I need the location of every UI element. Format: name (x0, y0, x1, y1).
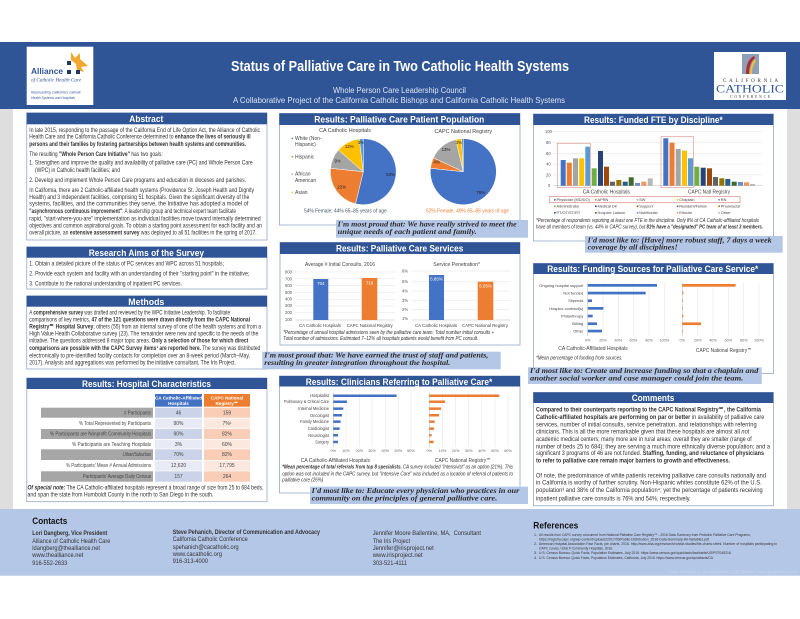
bar chart: service penetration: 5.85% (430, 276, 443, 282)
legend: ethnicity: American (295, 178, 316, 184)
logo: Alliance of Catholic Health Care: Representing California's Catholic (31, 90, 81, 94)
bar chart: funding CA Catholic: 60% (629, 339, 638, 343)
bar chart: FTE by discipline: 40 (546, 162, 551, 167)
title: Status of Palliative Care in Two Catholic Health Systems (231, 58, 569, 75)
bar chart: referrals CA Catholic: 0% (331, 449, 337, 453)
bar chart: referrals CA Catholic: Hospitalist (310, 393, 330, 398)
bar chart: referrals CAPC (427, 393, 512, 464)
bar chart: funding CAPC: 80% (740, 339, 748, 343)
text block: abstract body: "asynchronous continuous improvement": A leadership group and technical expert team facilitate (29, 209, 237, 215)
legend: disciplines: Nutritionist (639, 210, 658, 215)
bar chart: average initial consults: CAPC National Registry (347, 323, 393, 329)
text block: references list: https://registry.capc.org/wp-content/uploads/2017/09/Public-Distribution_2016-Data-Summary-All-Variables.pdf (539, 538, 710, 542)
bar chart: FTE by discipline (545, 129, 762, 215)
bar chart: referrals CA Catholic: Neurologist (308, 433, 330, 438)
text block: comments body: Compared to their counterparts reporting to the CAPC National Registry℠, the California (536, 406, 761, 413)
text block: abstract body: Health) and 3 independent facilities, comprising 51 hospitals. Given the significant diversity of the (29, 195, 250, 201)
text block: research aims list: 1. Obtain a detailed picture of the status of PC services and WPC across 51 hospitals; (29, 261, 224, 267)
bar chart: referrals CA Catholic: 30% (368, 449, 376, 453)
contact: Steve Pehanich: Steve Pehanich, Director of Communication and Advocacy (173, 529, 320, 536)
footnote: clinicians: palliative care (26%) (281, 477, 323, 483)
logo: California Catholic Conference (714, 52, 786, 100)
bar chart: referrals CA Catholic: Oncologist (310, 413, 330, 418)
bar chart: referrals CA Catholic: 40% (381, 449, 390, 453)
bar chart: service penetration: CA Catholic Hospitals (415, 323, 458, 329)
text block: comments body: population³ and 38% of the California population⁴; yet the percentage of patients receiving (536, 487, 763, 494)
contact: Lori Dangberg: www.thealliance.net (31, 552, 84, 559)
legend: ethnicity: Hispanic (295, 154, 315, 160)
table: hospital characteristics: 82% (222, 432, 233, 438)
callout: proud of earning trust (262, 352, 501, 369)
table: hospital characteristics: % Total Represented by Participants (79, 421, 151, 427)
bar chart: FTE by discipline: 80 (546, 140, 551, 145)
footnote: services: Total number of admissions. Estimated 7–12% all hospitals patients would benefit from PC consult. (283, 336, 478, 342)
text block: comments body: services, number of initial consults, service penetration, and relationships with referring (536, 421, 757, 428)
text block: comments body: academic medical centers; many more are in rural areas; overall they are smaller (range of (536, 436, 752, 443)
text block: special note (28, 485, 264, 498)
bar chart: service penetration: 4% (402, 288, 408, 294)
contact: Jennifer Ballentine (372, 530, 481, 567)
legend: disciplines: PT/OT/ST/RT (556, 210, 581, 215)
heading: funding sources: Results: Funding Sources for Palliative Care Service* (547, 264, 759, 275)
table: hospital characteristics: CAPC National (211, 396, 243, 400)
text block: comments body: clinicians. This is all the more remarkable given that these hospitals are almost all not (536, 429, 750, 436)
bar chart: average initial consults: 200 (285, 310, 293, 315)
legend: ethnicity: White (Non- (295, 136, 322, 142)
bar chart: average initial consults (285, 262, 395, 329)
text block: abstract body: objectives and common aspirational goals. To obtain a starting point assessment for each facility and an (29, 223, 262, 229)
bar chart: service penetration: 1% (402, 316, 408, 321)
footnote: services: *Percentage of annual hospital admissions seen by the palliative care team. Total number initial consults ÷ (283, 330, 494, 336)
bar chart: funding CA Catholic: Other (573, 328, 584, 334)
logo: Alliance of Catholic Health Care: Health Systems and Hospitals (31, 96, 75, 100)
table: hospital characteristics: 12,620 (171, 463, 186, 469)
bar chart: funding CA Catholic: Billing (572, 321, 583, 326)
text block: methods body: A comprehensive survey was drafted and reviewed by the WPC Initiative Leadership. To facilitate (29, 310, 231, 316)
bar chart: referrals CAPC: 30% (465, 449, 473, 453)
panel: methods (27, 296, 267, 369)
bar chart: average initial consults: 300 (285, 303, 293, 308)
panel: research aims (27, 247, 267, 289)
callout: proud of earning trust: I'm most proud that: We have earned the trust of staff and patients, (263, 352, 489, 359)
table: hospital characteristics: 159 (223, 410, 231, 416)
bar chart: referrals CA Catholic: Internal Medicine (298, 406, 330, 411)
text block: comments body: Of note, the predominance of white patients receiving palliative care consults nationally and (536, 473, 767, 480)
bar chart: average initial consults: 704 (317, 281, 325, 286)
text block: comments body: number of beds 25 to 684); they are serving a much more ethnically diverse population; and a (536, 443, 771, 450)
heading: research aims: Research Aims of the Survey (89, 248, 205, 259)
bar chart: funding CAPC: 0% (680, 339, 686, 343)
bar chart: funding CAPC: 60% (724, 339, 733, 343)
table: hospital characteristics: 17,795 (219, 463, 235, 469)
callout: educate every physician: I'd most like to: Educate every physician who practices in our (310, 488, 520, 495)
panel: hospital characteristics (27, 378, 267, 502)
bar chart: referrals CA Catholic: 50% (394, 449, 403, 453)
bar chart: service penetration: 5.05% (479, 284, 492, 288)
bar chart: average initial consults: 800 (285, 270, 293, 274)
table: hospital characteristics: 90% (173, 432, 184, 438)
bar chart: average initial consults: 500 (285, 290, 293, 295)
text block: references list: 3. (534, 551, 537, 555)
pie chart: CAPC national registry: 13% (442, 147, 450, 152)
text block: abstract body: rapid, "start-where-you-are" implementation as individual facilities move toward internally determined (29, 216, 261, 222)
header banner (0, 42, 800, 109)
legend: disciplines: Other (721, 210, 731, 215)
bar chart: funding CAPC: 100% (754, 339, 764, 343)
heading: hospital characteristics: Results: Hospital Characteristics (82, 379, 211, 390)
text block: abstract body: systems, facilities, and the communities they serve, the Initiative has adopted a model of (29, 202, 249, 208)
text block: references list (534, 533, 777, 560)
legend: disciplines: Chaplain (679, 197, 695, 202)
panel: funded FTE (533, 114, 774, 241)
panel: clinicians referring (279, 376, 520, 493)
pie chart: CAPC national registry: 52% Female; 49% 65–85 years of age (426, 209, 509, 215)
bar chart: average initial consults: 700 (285, 276, 293, 281)
table: hospital characteristics: % Participants are Teaching Hospitals (72, 442, 151, 448)
bar chart: funding CA Catholic: Not funded (563, 290, 583, 296)
table: hospital characteristics: Hospitals (168, 401, 189, 406)
legend: disciplines: Medical Dir (598, 204, 618, 209)
footnote: clinicians: option was not included in the CAPC survey, but "Intensive Care" was included as a location of referral of patients to (282, 471, 513, 477)
table: hospital characteristics: CA Catholic-Affiliated (155, 396, 202, 400)
bar chart: FTE by discipline: CA Catholic Hospitals (583, 190, 630, 196)
contact: Jennifer Ballentine: 303-521-4111 (373, 560, 407, 567)
contact: Steve Pehanich: spehanich@cacatholic.org (173, 544, 239, 551)
bar chart: average initial consults: Average # Initial Consults, 2016 (305, 262, 375, 268)
bar chart: service penetration: CAPC National Registry (462, 323, 509, 329)
text block: methods body: comparisons are possible with the CAPC Survey items¹ are reported here. The survey was distributed (29, 345, 260, 352)
heading: patient population: Results: Palliative Care Patient Population (314, 115, 484, 126)
bar chart: funding CA Catholic: Ongoing hospital support (539, 283, 584, 288)
bar chart: service penetration: 3% (402, 298, 408, 303)
contact: Jennifer Ballentine: www.irisproject.net (372, 552, 423, 559)
legend: disciplines: SW (639, 197, 646, 202)
bar chart: referrals CA Catholic: Family Medicine (300, 419, 330, 424)
bar chart: referrals CA Catholic: 10% (342, 449, 350, 453)
bar chart: funding CA Catholic: 100% (659, 339, 670, 343)
callout: create funding (528, 367, 762, 384)
callout: proud of meeting unique needs: unique needs of each patient and family. (338, 229, 477, 236)
text block: abstract body: The resulting "Whole Person Care Initiative" has two goals: (29, 152, 163, 158)
callout: proud of meeting unique needs (336, 220, 528, 238)
panel: abstract (27, 113, 267, 240)
pie chart: CA Catholic hospitals (292, 128, 396, 215)
bar chart: average initial consults: CA Catholic Hospitals (299, 323, 342, 329)
heading: funded FTE: Results: Funded FTE by Discipline* (584, 115, 723, 126)
text block: methods body: initiative. The questions addressed 8 major topic areas. Only a selection of those for which direct (29, 339, 248, 345)
table: hospital characteristics: 60% (222, 442, 233, 448)
bar chart: service penetration: 2% (402, 307, 408, 312)
pie chart: CAPC national registry: 3% (456, 140, 462, 145)
legend: ethnicity (292, 136, 322, 196)
bar chart: referrals CAPC: 50% (491, 449, 499, 453)
bar chart: referrals CA Catholic: Cardiologist (308, 426, 330, 431)
legend: ethnicity: Asian (295, 190, 308, 196)
contact: Lori Dangberg: ldangberg@thealliance.net (32, 545, 100, 552)
bar chart: funding CA Catholic: CA Catholic-Affiliated Hospitals (558, 346, 628, 352)
logo: Alliance of Catholic Health Care (27, 47, 93, 105)
text block: comments body: inpatient palliative care consults is 76% and 54%, respectively. (536, 495, 691, 502)
callout: educate every physician (310, 487, 528, 504)
callout: more robust staff: I'd most like to: [Have] more robust staff, 7 days a week (587, 237, 772, 244)
bar chart: referrals CA Catholic: Surgery (315, 440, 330, 444)
text block: abstract body: overall picture, an extensive assessment survey was deployed to all 51 facilities in the spring of 2017. (29, 230, 257, 236)
subtitle: A Collaborative Project of the California Catholic Bishops and California Catholic Health Systems (233, 96, 565, 105)
text block: methods body: Registry℠ Hospital Survey; others (55) from an internal survey of one of the health systems and from a (29, 323, 262, 330)
legend: ethnicity: African (295, 172, 311, 178)
table: hospital characteristics: 157 (174, 474, 183, 480)
logo: Alliance of Catholic Health Care: Alliance (31, 67, 64, 76)
table: hospital characteristics: Registry℠ (215, 401, 239, 406)
bar chart: funding CA Catholic: 0% (585, 339, 591, 343)
legend: disciplines: Hospice Liaison (598, 210, 625, 215)
pie chart: CAPC national registry: 76% (476, 190, 485, 195)
bar chart: funding CAPC: CAPC National Registry℠ (696, 347, 752, 354)
panel: palliative care services (280, 242, 520, 345)
text block: comments body: to refer to palliative care remain major barriers to growth and effectiveness. (536, 458, 730, 465)
bar chart: referrals CAPC: 60% (504, 449, 512, 453)
bar chart: referrals CA Catholic: 20% (355, 449, 364, 453)
footnote: services (283, 330, 494, 342)
footnote: FTE (536, 218, 763, 230)
contact: Lori Dangberg: Alliance of Catholic Health Care (32, 538, 111, 545)
footnote: clinicians: *Mean percentage of total referrals from top 8 specialists. CA survey included "Intensivist" as an option (21%). This (282, 465, 513, 471)
bar chart: FTE by discipline: 60 (546, 151, 551, 156)
bar chart: funding CAPC: 20% (694, 339, 702, 343)
bar chart: average initial consults: 100 (285, 317, 293, 322)
footer band (0, 509, 800, 576)
legend: disciplines: Support (639, 204, 654, 209)
table: hospital characteristics: 3% (175, 442, 183, 448)
text block: methods body: High Value Health Collaborative survey (23). The remainder were new and specific to the needs of the (29, 331, 259, 337)
text block: references list: American Hospital Association Fast Facts, pie charts, 2016. http://www.aha.org/research/rc/stat-studies/file-charts.shtml. Number of hospitals participating in (539, 542, 777, 546)
legend: disciplines: Administrator (556, 204, 580, 209)
text block: comments body (536, 406, 771, 502)
contact: Steve Pehanich (172, 529, 320, 565)
logo: California Catholic Conference: CALIFORNIA (723, 79, 778, 84)
text block: methods body: 2017). Analysis and aggregations was performed by the initiative consultant, The Iris Project. (29, 360, 236, 366)
table: hospital characteristics: 7%¹ (223, 421, 232, 427)
heading: abstract: Abstract (129, 114, 164, 125)
callout: educate every physician: community on the principles of general palliative care. (312, 495, 498, 502)
text block: research aims list: 2. Provide each system and facility with an understanding of their "starting point" in the initiative; (29, 271, 250, 277)
text block: references list: CAPC survey / total # Community Hospitals, 2016. (539, 547, 613, 551)
bar chart: referrals CAPC: 20% (452, 449, 460, 453)
bar chart: service penetration: 6% (402, 268, 408, 274)
bar chart: referrals CA Catholic: 60% (407, 449, 415, 453)
text block: research aims list (29, 261, 250, 287)
bar chart: referrals CAPC: 0% (427, 449, 433, 453)
panel: patient population (279, 113, 520, 225)
legend: disciplines: Pharmacist (721, 204, 741, 209)
subtitle: Whole Person Care Leadership Council (333, 86, 466, 95)
legend: disciplines (549, 197, 741, 215)
text block: abstract body: In California, there are 2 Catholic-affiliated health systems (Providence St. Joseph Health and Dignity (29, 188, 254, 194)
pie chart: CAPC national registry (426, 129, 509, 215)
bar chart: FTE by discipline: 20 (546, 172, 551, 177)
callout: proud of meeting unique needs: I'm most proud that: We have really strived to meet the (337, 221, 517, 228)
legend: disciplines: Ethicist (679, 210, 693, 215)
pie chart: CA Catholic hospitals: 12% (345, 144, 354, 149)
contact: Lori Dangberg: 916-552-2633 (32, 560, 68, 567)
table: hospital characteristics: 264 (223, 474, 231, 480)
heading: palliative care services: Results: Palliative Care Services (336, 244, 463, 255)
bar chart: funding CA Catholic: Hospice contract(s) (549, 306, 584, 311)
callout: create funding: another social worker and case manager could join the team. (530, 376, 744, 382)
pie chart: CA Catholic hospitals: 22% (337, 184, 346, 189)
heading: methods: Methods (128, 297, 164, 308)
bar chart: referrals CA Catholic: CA Catholic-Affiliated Hospitals (301, 458, 370, 464)
bar chart: average initial consults: 600 (285, 283, 293, 288)
text block: references list: 2. (534, 542, 537, 546)
pie chart: CA Catholic hospitals: CA Catholic Hospitals (319, 128, 371, 134)
contact: Lori Dangberg: Lori Dangberg, Vice President (32, 530, 107, 537)
table: hospital characteristics: 70% (173, 452, 184, 458)
bar chart: average initial consults: 718 (366, 280, 374, 286)
callout: more robust staff (585, 236, 783, 253)
text block: references list: All results from CAPC survey consumed from National Palliative Care Registry™ - 2016 Data Summary from Pediatric Palliative Care Programs; (539, 533, 751, 537)
callout: proud of earning trust: resulting in greater integration throughout the hospital. (264, 360, 451, 367)
text block: special note: and span the state from Humboldt County in the north to San Diego in the south. (28, 492, 214, 498)
legend: disciplines: RN (721, 197, 727, 202)
table: hospital characteristics: 82% (222, 452, 233, 458)
pie chart: CA Catholic hospitals: 54% Female; 44% 65–85 years of age (304, 209, 387, 215)
text block: comments body: Catholic-affiliated hospitals are performing on par or better in availability of palliative care (536, 414, 765, 421)
text block: references list: U.S. Census Bureau: Quick Facts, Population Estimates, July 2016. https://www.census.gov/quickfacts/fact/table/US/PST045216. (539, 551, 732, 555)
bar chart: referrals CA Catholic: Pulmonary & Critical Care (284, 399, 330, 404)
pie chart: CA Catholic hospitals: 9% (335, 158, 341, 163)
contact: Jennifer Ballentine: Jennifer Moore Ballentine, MA, Consultant (373, 530, 481, 537)
table: hospital characteristics: % Participants are Nonprofit Community Hospitals (50, 432, 151, 438)
table: hospital characteristics: # Participants (124, 410, 151, 416)
heading: comments: Comments (632, 393, 674, 404)
logo: California Catholic Conference: CONFERENCE (730, 95, 771, 99)
text block: methods body (29, 310, 262, 366)
bar chart: service penetration (402, 262, 510, 329)
bar chart: FTE by discipline: 0 (548, 183, 551, 188)
table: hospital characteristics: % Participants' Mean # Annual Admissions (66, 463, 151, 469)
bar chart: referrals CAPC: 10% (439, 449, 447, 453)
contact: Steve Pehanich: 916-313-4000 (173, 558, 208, 565)
legend: disciplines: APRN (598, 197, 608, 202)
text block: abstract body: 2. Develop and implement Whole Person Care programs and education in dioceses and parishes. (29, 178, 246, 184)
footnote: clinicians (281, 465, 513, 483)
text block: abstract body: (WPC) in Catholic health facilities; and (35, 168, 120, 174)
subtitle (233, 86, 565, 105)
legend: ethnicity: Hispanic) (295, 142, 316, 148)
bar chart: average initial consults: 400 (285, 296, 293, 302)
panel: comments (533, 392, 774, 506)
text block: research aims list: 3. Contribute to the national understanding of inpatient PC services. (29, 281, 182, 287)
bar chart: service penetration: 5% (402, 279, 408, 284)
footnote: FTE: have all members of team (vs. 44% in CAPC survey), but 81% have a "designated" PC team of at least 3 members. (536, 224, 763, 230)
pie chart: CA Catholic hospitals: 3% (358, 140, 364, 145)
table: hospital characteristics: Urban/Suburban (123, 452, 151, 458)
table: hospital characteristics (41, 394, 250, 482)
text block: references list: 1. (534, 533, 537, 537)
bar chart: funding CA Catholic: 80% (645, 339, 653, 343)
text block: special note: Of special note: The CA Catholic-affiliated hospitals represent a broad range of size from 25 to 684 beds, (28, 485, 264, 491)
bar chart: funding CA Catholic: Philanthropy (561, 314, 583, 318)
contact: Jennifer Ballentine: Jennifer@irisproject.net (373, 545, 434, 552)
pie chart: CA Catholic hospitals: 53% (386, 172, 395, 177)
text block: abstract body: persons and their families by fostering partnerships between health systems and communities. (29, 142, 246, 148)
heading: contacts: Contacts (32, 516, 67, 526)
pie chart: CAPC national registry: 4% (434, 159, 440, 164)
text block: methods body: electronically to pre-identified facility contacts for completion over an 8-week period (March–May, (29, 353, 250, 359)
table: hospital characteristics: 46 (176, 410, 181, 416)
bar chart: funding CA Catholic: 40% (614, 339, 623, 343)
contact: Steve Pehanich: California Catholic Conference (173, 536, 248, 543)
bar chart: service penetration: Service Penetration* (433, 262, 481, 268)
callout: more robust staff: coverage by all disciplines! (588, 245, 678, 252)
text block: abstract body (29, 128, 262, 236)
logo: California Catholic Conference: CATHOLIC (716, 84, 784, 96)
table: hospital characteristics: Participants' Average Daily Census (83, 474, 151, 480)
bar chart: funding CA Catholic: Stipends (568, 298, 583, 303)
footnote: funding: *Mean percentage of funding from sources. (536, 355, 623, 361)
legend: disciplines: Resident/Fellow (679, 204, 707, 209)
bar chart: funding CAPC: 40% (709, 339, 717, 343)
text block: abstract body: 1. Strengthen and improve the quality and availability of palliative care (PC) and Whole Person Care (29, 161, 253, 167)
heading: references: References (533, 520, 578, 531)
bar chart: referrals CAPC: 40% (478, 449, 486, 453)
text block: comments body: in California is worthy of further scrutiny. Non-Hispanic whites constitute 62% of the U.S. (536, 480, 762, 487)
bar chart: funding CA Catholic (539, 283, 670, 352)
bar chart: referrals CAPC: CAPC National Registry℠ (435, 457, 491, 464)
pie chart: CAPC national registry: CAPC National Registry (435, 129, 492, 135)
text block: comments body: significant 3 programs of 46 are not funded. Staffing, funding, and reluctance of physicians (536, 450, 764, 457)
panel: funding sources (533, 263, 774, 374)
bar chart: FTE by discipline: 100 (545, 129, 553, 134)
text block: references list: U.S. Census Bureau: Quick Facts, Population Estimates, California, July 2016. https://www.census.gov/quickfacts/CA (539, 556, 713, 560)
text block: abstract body: Health Care and the California Catholic Conference determined to enhance the lives of seriously ill (29, 135, 251, 141)
text block: references list: 4. (534, 556, 537, 560)
logo: Alliance of Catholic Health Care: of Catholic Health Care (31, 78, 82, 84)
text block: abstract body: In late 2015, responding to the passage of the California End of Life Option Act, the Alliance of Catholic (29, 128, 260, 134)
bar chart: FTE by discipline: CAPC Natl Registry (688, 190, 730, 196)
bar chart: referrals CA Catholic (284, 393, 415, 464)
contact: Jennifer Ballentine: The Iris Project (373, 538, 410, 545)
text block: methods body: comparisons of key metrics, 47 of the 121 questions were drawn directly from the CAPC National (29, 317, 250, 323)
bar chart: funding CAPC (680, 283, 764, 354)
heading: clinicians referring: Results: Clinicians Referring to Palliative Care* (306, 377, 493, 388)
table: hospital characteristics: 90% (173, 421, 184, 427)
legend: disciplines: Physician (MD/DO) (556, 197, 590, 202)
callout: create funding: I'd most like to: Create and increase funding so that a chaplain and (529, 368, 759, 375)
contact: Lori Dangberg (31, 530, 111, 567)
bar chart: funding CA Catholic: 20% (599, 339, 607, 343)
contact: Steve Pehanich: www.cacatholic.org (172, 551, 223, 558)
